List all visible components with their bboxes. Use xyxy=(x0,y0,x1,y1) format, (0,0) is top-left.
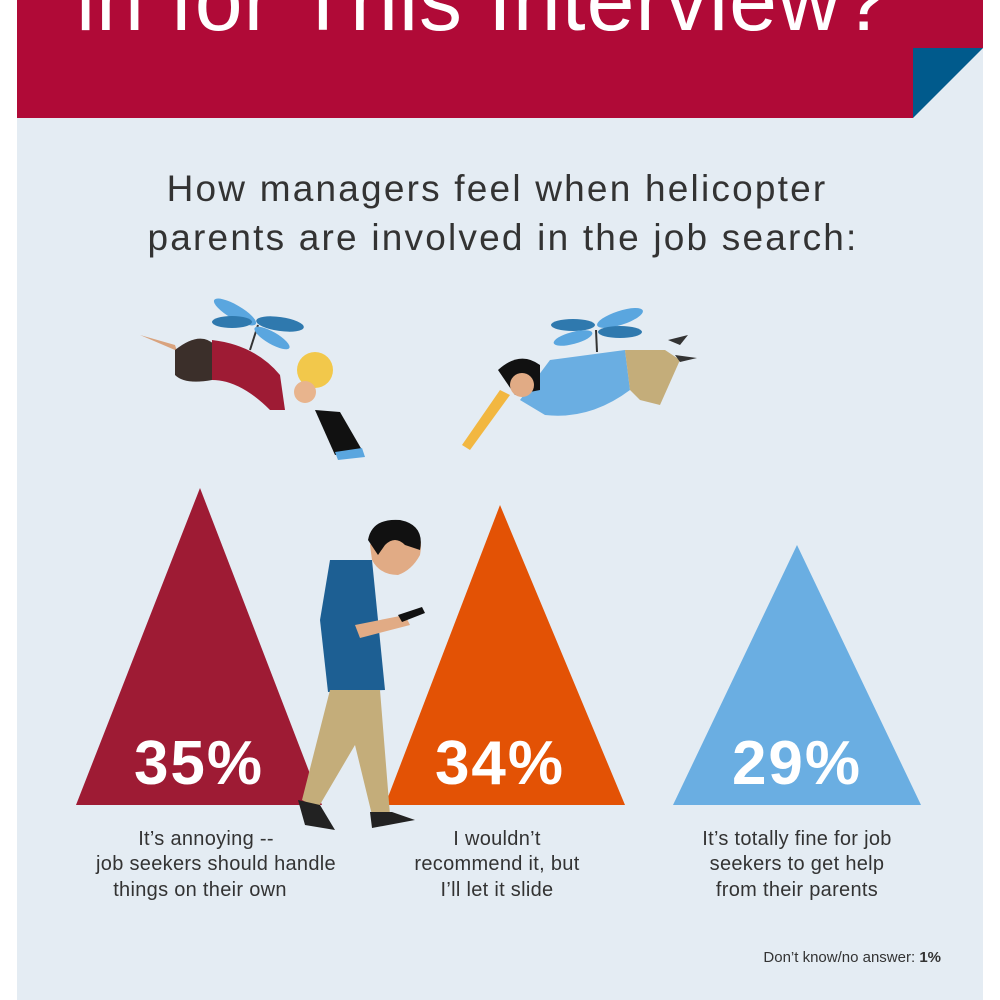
caption: 29% xyxy=(702,828,892,901)
triangle: 29% xyxy=(673,545,921,805)
illustration: helicopter mom xyxy=(140,294,365,460)
caption: 34% xyxy=(414,828,580,901)
caption: 34%: I wouldn’t xyxy=(453,828,541,850)
subtitle xyxy=(147,168,859,258)
caption: 29%: from their parents xyxy=(716,879,878,901)
subtitle: How managers feel when helicopter xyxy=(167,168,827,209)
caption: 35%: things on their own xyxy=(113,879,287,901)
triangle: 29%: 29% xyxy=(732,729,862,798)
triangle: 34%: 34% xyxy=(435,729,565,798)
illustration: young man with phone xyxy=(298,520,425,830)
caption: 29%: seekers to get help xyxy=(710,853,884,875)
triangle: 34% xyxy=(385,505,625,805)
triangle: 35% xyxy=(76,488,322,805)
caption: 29%: It’s totally fine for job xyxy=(702,828,892,850)
illustration: helicopter dad xyxy=(462,304,697,450)
triangle: 35%: 35% xyxy=(134,729,264,798)
caption: 34%: recommend it, but xyxy=(414,853,580,875)
caption: 35%: job seekers should handle xyxy=(95,853,336,875)
title banner xyxy=(17,0,983,118)
caption: 34%: I’ll let it slide xyxy=(441,879,553,901)
footnote: Don’t know/no answer: 1% xyxy=(763,949,941,966)
caption: 35% xyxy=(95,828,336,901)
subtitle: parents are involved in the job search: xyxy=(147,217,859,258)
caption: 35%: It’s annoying -- xyxy=(138,828,274,850)
